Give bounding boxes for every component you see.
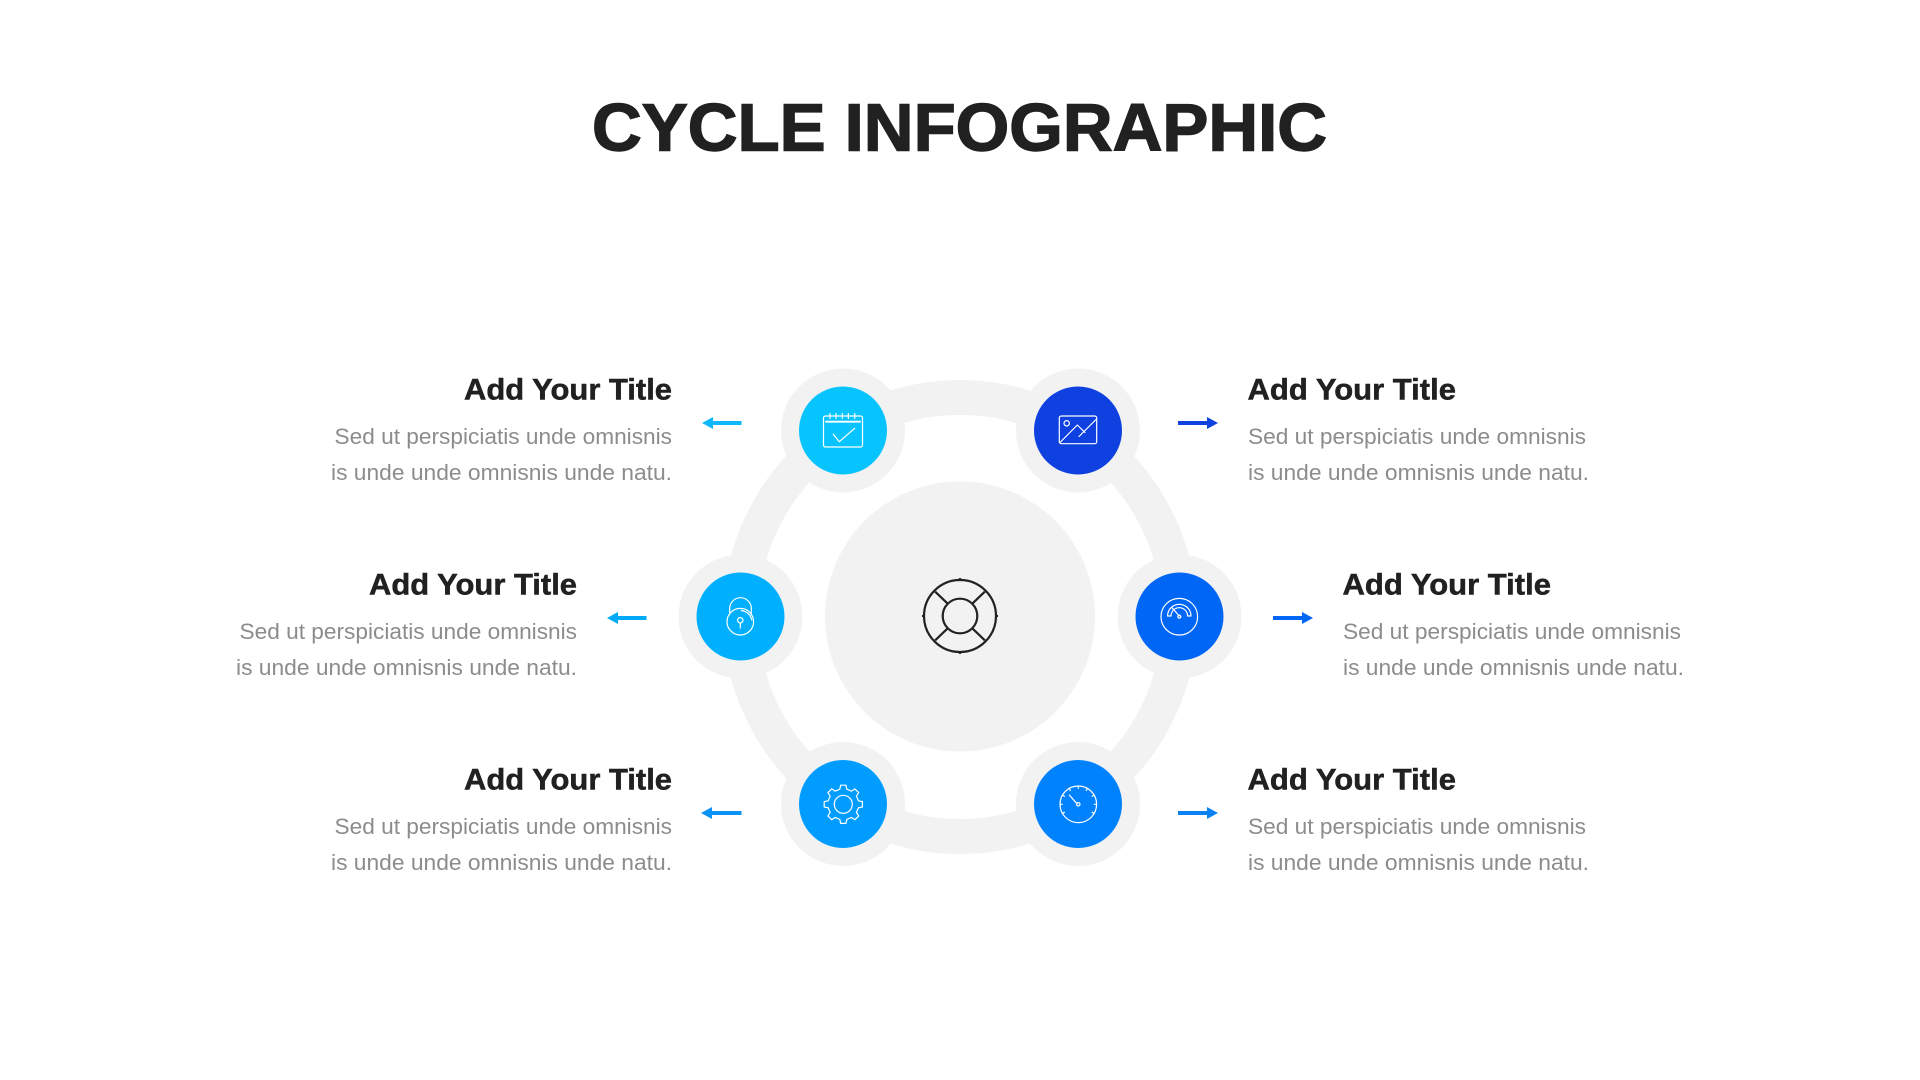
text block: middle right: Add Your Title xyxy=(1342,568,1551,601)
arrow: top left xyxy=(702,417,742,429)
text block: bottom left xyxy=(331,763,672,875)
text block: bottom left: is unde unde omnisnis unde natu. xyxy=(331,850,672,875)
arrow: bottom left xyxy=(701,807,742,819)
text block: middle left: Sed ut perspiciatis unde omnisnis xyxy=(240,619,577,644)
text block: top left: Add Your Title xyxy=(464,373,672,406)
text block: top left: is unde unde omnisnis unde natu. xyxy=(331,460,672,485)
text block: bottom right: Add Your Title xyxy=(1248,763,1456,796)
node: top left calendar xyxy=(781,368,905,492)
text block: top left: Sed ut perspiciatis unde omnisnis xyxy=(334,424,672,449)
icon: gauge xyxy=(1161,598,1198,635)
text block: bottom right: is unde unde omnisnis unde natu. xyxy=(1248,850,1589,875)
text block: top right xyxy=(1248,373,1589,485)
text block: middle left: Add Your Title xyxy=(369,568,577,601)
icon: lifebuoy xyxy=(922,578,998,654)
text block: top right: is unde unde omnisnis unde natu. xyxy=(1248,460,1589,485)
text block: middle right: is unde unde omnisnis unde natu. xyxy=(1343,655,1684,680)
text block: bottom left: Add Your Title xyxy=(464,763,672,796)
text block: top right: Add Your Title xyxy=(1248,373,1456,406)
arrow: bottom right xyxy=(1178,807,1218,819)
title: CYCLE INFOGRAPHIC xyxy=(592,90,1327,166)
arrow: middle left xyxy=(607,612,646,624)
icon: lock xyxy=(727,598,754,635)
text block: middle left xyxy=(236,568,577,680)
text block: top right: Sed ut perspiciatis unde omnisnis xyxy=(1248,424,1586,449)
text block: middle right: Sed ut perspiciatis unde omnisnis xyxy=(1343,619,1681,644)
node: middle left lock xyxy=(678,554,802,678)
text block: bottom left: Sed ut perspiciatis unde omnisnis xyxy=(334,814,672,839)
text block: middle right xyxy=(1342,568,1684,680)
node: bottom left gear xyxy=(781,742,905,866)
node: bottom right dial xyxy=(1016,742,1140,866)
icon: dial xyxy=(1060,786,1097,823)
node: middle right gauge xyxy=(1118,554,1242,678)
icon: gear xyxy=(824,785,862,823)
center circle with lifebuoy icon xyxy=(825,482,1095,752)
text block: top left xyxy=(331,373,672,485)
text block: bottom right xyxy=(1248,763,1589,875)
icon: image xyxy=(1059,416,1097,444)
arrow: top right xyxy=(1178,417,1218,429)
text block: bottom right: Sed ut perspiciatis unde omnisnis xyxy=(1248,814,1586,839)
arrow: middle right xyxy=(1273,612,1313,624)
text block: middle left: is unde unde omnisnis unde natu. xyxy=(236,655,577,680)
cycle ring xyxy=(740,398,1180,836)
icon: calendar xyxy=(824,414,862,447)
node: top right image xyxy=(1016,368,1140,492)
